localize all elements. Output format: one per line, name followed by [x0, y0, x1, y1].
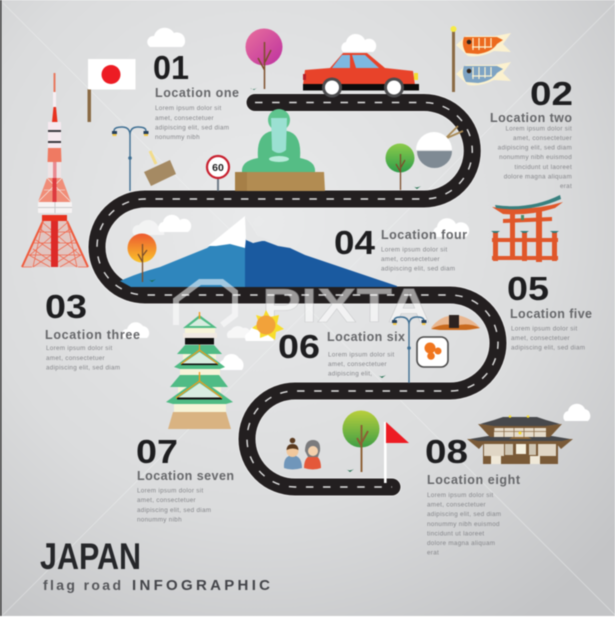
number and text: location eight: nonummy nibh euismod [427, 521, 500, 528]
koi streamers [450, 26, 511, 92]
number and text: location three [45, 288, 140, 372]
number and text: location eight [425, 433, 521, 556]
number and text: location four: amet, consectetuer [381, 256, 440, 263]
icon: sushi roll [417, 337, 448, 367]
number and text: location two: dolore magna aliquam [504, 174, 572, 180]
number and text: location six: Location six [327, 330, 405, 344]
number and text: location two: amet, consectetuer [513, 135, 572, 142]
orange tree [128, 234, 156, 282]
title: INFOGRAPHIC [132, 577, 270, 594]
number and text: location one: Lorem ipsum dolor sit [155, 105, 222, 112]
Tokyo tower [22, 73, 88, 267]
number and text: location five: Lorem ipsum dolor sit [511, 326, 578, 332]
number and text: location two: erat [560, 183, 572, 190]
number and text: location four [334, 224, 467, 272]
number and text: location one: 01 [153, 49, 189, 86]
number and text: location three: Lorem ipsum dolor sit [46, 345, 112, 352]
number and text: location three: amet, consectetuer [46, 355, 105, 362]
pink tree [246, 28, 282, 90]
temple [467, 415, 573, 464]
great Buddha statue [235, 109, 325, 191]
green tree [386, 144, 421, 190]
title: flag road [43, 577, 121, 593]
watermark [176, 280, 430, 333]
number and text: location eight: erat [427, 550, 439, 556]
number and text: location seven: nonummy nibh [137, 516, 182, 524]
number and text: location four: adipiscing elit, sed diam [381, 266, 455, 272]
number and text: location eight: amet, consectetuer [427, 502, 486, 508]
number and text: location three: 03 [45, 288, 87, 325]
number and text: location eight: dolore magna aliquam [427, 540, 495, 547]
number and text: location seven: amet, consectetuer [137, 497, 196, 504]
number and text: location two: nonummy nibh euismod [499, 154, 572, 161]
number and text: location six: adipiscing elit, [328, 370, 372, 378]
number and text: location seven: 07 [136, 433, 178, 470]
goal flag [384, 422, 409, 483]
cloud group [122, 28, 590, 421]
number and text: location six: amet, consectetuer [328, 361, 387, 368]
number and text: location one [153, 49, 239, 141]
number and text: location two: Lorem ipsum dolor sit [506, 126, 572, 132]
number and text: location seven [136, 433, 234, 524]
number and text: location three: adipiscing elit, sed diam [46, 364, 120, 372]
speed limit sign [207, 156, 229, 191]
number and text: location five: 05 [507, 270, 549, 307]
icon: paper wrapped parcel [144, 151, 176, 186]
number and text: location two: adipiscing elit, sed diam [498, 144, 572, 152]
sun [252, 310, 284, 340]
number and text: location one: Location one [155, 86, 239, 100]
title [40, 536, 270, 594]
red car [303, 53, 419, 98]
number and text: location two: tincidunt ut laoreet [515, 164, 572, 171]
number and text: location eight: Lorem ipsum dolor sit [427, 492, 494, 499]
number and text: location six: 06 [278, 328, 320, 365]
street lamp one [112, 127, 148, 191]
number and text: location seven: Lorem ipsum dolor sit [137, 488, 204, 494]
watermark: PIXTA [262, 280, 430, 333]
small plant [378, 375, 386, 378]
number and text: location four: Lorem ipsum dolor sit [381, 246, 448, 254]
number and text: location five: Location five [510, 307, 592, 321]
number and text: location five: amet, consectetuer [511, 335, 570, 342]
number and text: location eight: tincidunt ut laoreet [427, 530, 484, 538]
number and text: location one: adipiscing elit, sed diam [155, 124, 229, 132]
number and text: location five [507, 270, 592, 352]
Osaka castle [166, 312, 233, 429]
number and text: location four: Location four [381, 228, 467, 242]
Mount Fuji [120, 216, 397, 287]
number and text: location four: 04 [334, 224, 376, 261]
rice bowl with chopsticks [416, 126, 463, 168]
number and text: location three: Location three [45, 328, 140, 342]
number and text: location two: Location two [490, 111, 572, 125]
kimono couple [284, 438, 321, 470]
number and text: location eight: adipiscing elit, sed diam [427, 511, 501, 518]
number and text: location two: 02 [530, 75, 573, 112]
flag of Japan [88, 59, 136, 122]
number and text: location one: amet, consectetuer [155, 115, 214, 122]
number and text: location eight: Location eight [427, 473, 521, 487]
street lamp two [392, 317, 426, 383]
title: JAPAN [40, 536, 141, 577]
number and text: location six [278, 328, 405, 378]
number and text: location eight: 08 [425, 433, 468, 470]
number and text: location two [490, 75, 573, 190]
number and text: location seven: adipiscing elit, sed diam [137, 507, 211, 514]
number and text: location five: adipiscing elit, sed diam [511, 344, 585, 352]
icon: nigiri sushi [431, 315, 480, 330]
number and text: location one: nonummy nibh [155, 134, 200, 141]
lime tree [342, 410, 380, 472]
road [97, 102, 498, 487]
speed limit sign: 60 [212, 162, 224, 174]
number and text: location six: Lorem ipsum dolor sit [328, 352, 394, 358]
torii gate [491, 195, 563, 262]
number and text: location seven: Location seven [137, 469, 234, 483]
